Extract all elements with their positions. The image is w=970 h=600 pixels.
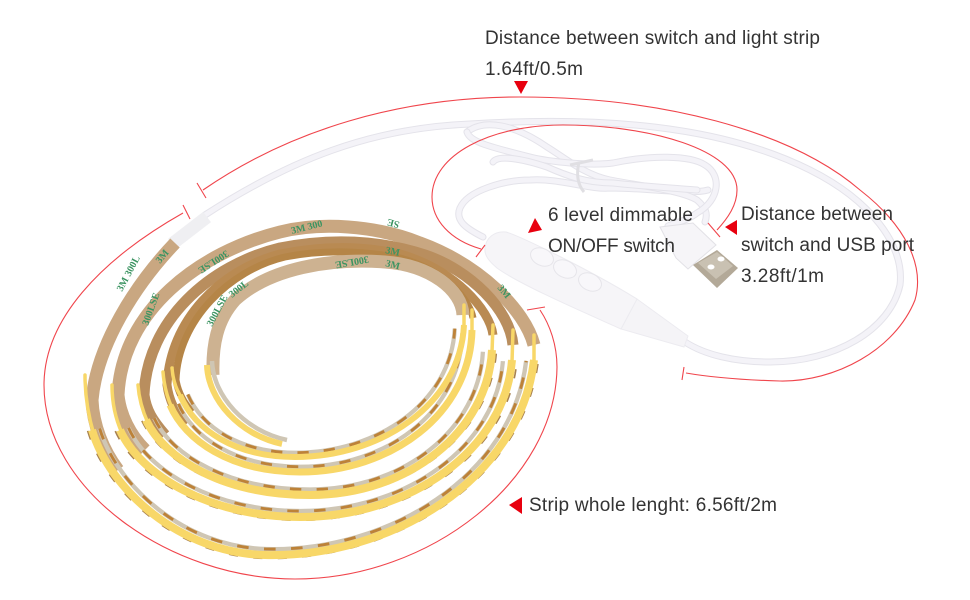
3M backing print (115, 216, 513, 328)
cable tie (570, 160, 593, 192)
marker triangle (528, 218, 542, 233)
USB plug (660, 223, 738, 288)
3M backing print: 3M (495, 283, 513, 301)
plug hole 2 (708, 264, 714, 270)
USB cable bundle (459, 125, 716, 237)
callout: distance switch to light strip: 1.64ft/0.5m (485, 59, 583, 80)
second yellow run (115, 359, 517, 520)
3M backing print: 300LSE (140, 291, 163, 327)
switch taper (621, 299, 688, 347)
3M backing print: 300LSE (196, 247, 230, 275)
lead connector (172, 217, 207, 244)
main cable: strip to switch (205, 121, 900, 362)
3M backing print: 3M (154, 247, 172, 266)
button 2 (551, 256, 579, 282)
marker triangle (514, 81, 528, 94)
fifth yellow run (180, 325, 464, 457)
thin strip edge highlights (85, 305, 534, 435)
callout: distance switch to USB: Distance between (741, 204, 893, 225)
third yellow run (142, 349, 497, 498)
marker triangle (509, 497, 522, 514)
3M backing print: 3M 300L (115, 254, 143, 293)
3M backing print: 3M (384, 258, 401, 273)
callout: distance switch to light strip (485, 28, 820, 94)
red measure arc: USB cable (432, 125, 737, 257)
button 3 (576, 269, 604, 295)
plug boot (660, 223, 716, 269)
3M backing print: 300L (227, 278, 251, 300)
LED strip coil (85, 216, 538, 558)
outer yellow run (88, 360, 538, 558)
tan backing: second wrap (144, 242, 513, 435)
3M backing print: SE (386, 216, 401, 230)
callout: dimmable switch: 6 level dimmable (548, 205, 693, 226)
dimmer switch (485, 232, 688, 347)
metal shell (693, 250, 738, 288)
callout: distance switch to USB: switch and USB port (741, 235, 915, 256)
callout: dimmable switch: ON/OFF switch (548, 236, 675, 257)
tan backing: third wrap (167, 248, 493, 425)
callout: distance switch to light strip: Distance between switch and light strip (485, 28, 820, 49)
callout: distance switch to USB (725, 204, 915, 287)
callout: distance switch to USB: 3.28ft/1m (741, 266, 824, 287)
tan backing: first run (92, 243, 175, 470)
strip end run (207, 361, 287, 444)
tan backing: outer wrap (118, 226, 534, 450)
red measure arc: switch to strip (197, 97, 918, 381)
tan backing: fourth wrap (176, 252, 473, 412)
callout: dimmable switch (528, 205, 693, 257)
fourth yellow run (170, 330, 472, 472)
callout: strip length: Strip whole lenght: 6.56ft/2m (529, 495, 777, 516)
red measure arc: strip length (44, 205, 557, 579)
tan backing: inner wrap (213, 261, 463, 375)
3M backing print: 3M (384, 245, 401, 259)
switch body (485, 232, 637, 329)
3M backing print: 300LSE (334, 253, 370, 270)
3M backing print: 3M 300 (290, 219, 324, 237)
plug hole 1 (718, 256, 724, 262)
marker triangle (725, 220, 737, 235)
button 1 (528, 244, 556, 270)
3M backing print: 300LSE (205, 293, 231, 328)
